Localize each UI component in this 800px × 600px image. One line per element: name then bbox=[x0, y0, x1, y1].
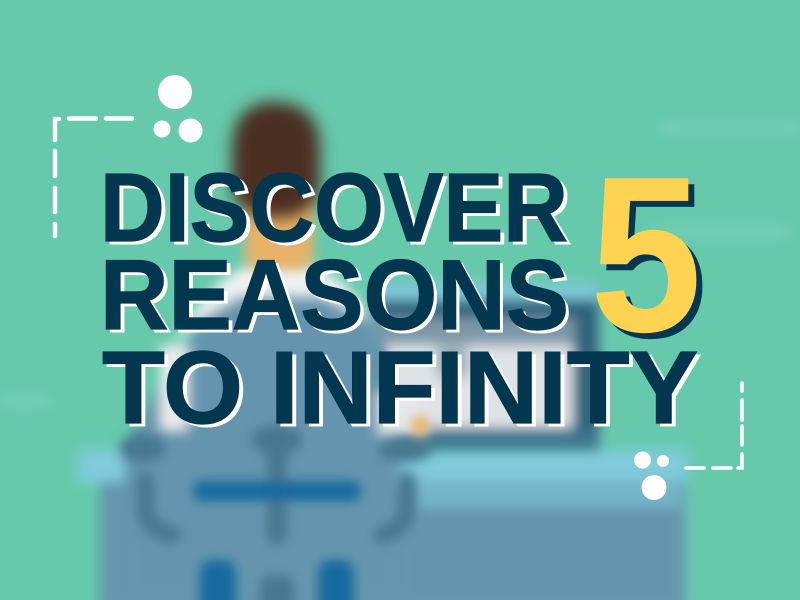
title line: TO INFINITY: TO bbox=[102, 330, 243, 445]
title line: REASONS: REASONS bbox=[104, 242, 572, 353]
dots: top left bbox=[154, 75, 202, 142]
title line: TO INFINITY: INFINITY bbox=[274, 333, 702, 448]
title line: TO INFINITY: INFINITY bbox=[270, 330, 698, 445]
person torso bbox=[125, 262, 426, 600]
title bbox=[100, 153, 702, 448]
faint background streaks bbox=[0, 122, 800, 407]
title line: TO INFINITY bbox=[102, 330, 702, 448]
monitor bbox=[370, 283, 600, 450]
shirt and arm details bbox=[120, 415, 431, 600]
dashed bracket: top left bbox=[55, 118, 132, 236]
number 5: 5 bbox=[596, 137, 708, 385]
title line: REASONS: REASONS bbox=[100, 239, 569, 350]
title line: DISCOVER: DISCOVER bbox=[100, 153, 568, 262]
dots: bottom right bbox=[634, 452, 669, 500]
title line: TO INFINITY: TO bbox=[106, 333, 247, 448]
title line: DISCOVER: DISCOVER bbox=[104, 156, 572, 265]
number 5: 5 bbox=[590, 131, 702, 379]
person head and neck bbox=[232, 102, 320, 270]
dashed bracket: bottom right bbox=[686, 383, 742, 468]
desk and lower body bbox=[78, 450, 688, 600]
